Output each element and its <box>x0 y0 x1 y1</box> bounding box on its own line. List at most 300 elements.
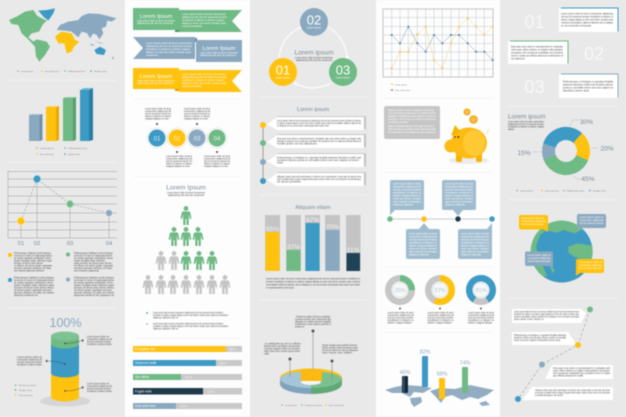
card 2: velit esse cillum dolore eu fugiat nulla pariatur <box>511 48 563 52</box>
text: above 01: sed do eiusmod tempor inci <box>145 112 171 116</box>
panel: percent columns <box>265 205 361 290</box>
note: blue: ac turpis egestas vestibulum tortor <box>14 282 53 284</box>
note: green: ac turpis egestas vestibulum tortor <box>74 257 113 260</box>
bar 45%: 45% <box>400 370 411 376</box>
donut legend: Semper risus <box>593 190 607 192</box>
bubble: gray top-right: Lorem ipsum dolor sit <box>580 216 604 219</box>
ribbon: blue-gray: Lorem ipsum dolor sit amet consectetur <box>200 52 238 54</box>
timeline dots <box>387 216 495 222</box>
bar: yellow <box>46 106 59 141</box>
callout text: consectetur adipiscing elit <box>87 385 112 388</box>
donut 81%: 81% <box>476 288 487 294</box>
box 3: sed do eiusmod tempor <box>409 238 437 242</box>
ribbon: yellow: incididunt ut labore et dolore magna <box>182 79 225 82</box>
callout: top: vestibulum ante ipsum primis in <box>295 323 332 326</box>
card 1: dolore magna aliqua ut enim ad minim veniam quis <box>561 18 614 22</box>
bubble: yellow right <box>576 259 604 276</box>
ribbon: green: Lorem ipsum dolor sit amet consectetur <box>137 20 175 22</box>
note 3: esse cillum dolore eu fugiat nulla pariatur excepteur <box>553 370 610 372</box>
number 02: 02 <box>584 44 604 64</box>
panel: ribbons <box>133 8 242 92</box>
panel: line chart <box>8 171 117 247</box>
box 2: incididunt ut labore et <box>445 192 473 194</box>
bubble: gray top-right <box>577 214 606 231</box>
card 3: tincidunt dictum porta ex convallis lorem sed sem sapien id lorem <box>277 159 359 162</box>
description: Lorem ipsum dolor sit amet consectetur <box>508 120 544 124</box>
bar: Duis aute irure: Duis aute irure <box>135 404 156 408</box>
donut legend: Lorem ipsum <box>520 190 533 192</box>
note: blue: senectus et netus et malesuada fames <box>14 279 55 282</box>
point: 03 <box>66 200 74 208</box>
bar: Fugiat nulla: 70% <box>207 390 215 394</box>
axis labels: 01 <box>18 241 24 247</box>
ring legend: Lorem ipsum <box>285 404 297 407</box>
box 2 <box>442 180 476 216</box>
note 1 <box>512 309 586 323</box>
text: below 02: didunt ut labore et dolore <box>166 162 193 166</box>
card 2: Duis aute irure dolor in reprehenderit in voluptate velit esse cillum dolore eu fugiat nulla <box>277 138 362 140</box>
box 2: Lorem ipsum dolor sit amet <box>445 182 473 186</box>
box 4: sed do eiusmod tempor <box>461 238 489 242</box>
circle 02: 02 <box>307 12 321 28</box>
map legend: Duis aute irure <box>45 70 60 73</box>
note: green: eget tempor sit amet ante donec <box>74 262 113 265</box>
cylinder legend: Semper risus <box>19 389 33 392</box>
ribbon: green: adipiscing elit sed do eiusmod tempor <box>182 16 227 19</box>
ribbon: yellow: Lorem ipsum dolor sit amet consectetur <box>137 80 175 82</box>
text: above 03: Lorem ipsum dolor sit amet <box>184 108 210 110</box>
text: above 03: consectetur adipiscing elit <box>184 110 210 113</box>
note: gray: ut labore et dolore magna aliqua ut enim ad minim veniam quis nostrud exercitation <box>153 325 229 328</box>
callout: top: Vivamus mattis rhoncus volutpat <box>296 316 330 318</box>
heading: Lorem ipsum <box>508 114 546 120</box>
map legend: Lorem ipsum <box>21 70 33 73</box>
card 4: Aliquam etiam erat velit scelerisque in dictum non consectetur a erat nam at lectus urna <box>277 176 362 178</box>
bar: Excepteur sint: 86% <box>229 348 237 352</box>
box 2: consectetur adipiscing elit <box>445 186 473 188</box>
card 2: pariatur excepteur sint occaecat cupidatat non proident sunt in culpa qui officia deserunt <box>277 140 361 143</box>
gray text box: Mauris blandit aliquet elit eget tincidunt <box>388 125 434 128</box>
ribbon: green: aliqua ut enim ad minim veniam quis <box>182 22 227 25</box>
callout text: Lorem ipsum dolor sit <box>87 336 109 338</box>
ribbon: yellow <box>133 68 242 92</box>
donut <box>541 126 591 176</box>
callout: top: porta et <box>295 326 304 328</box>
donut legend: Duis aute irure <box>545 190 560 192</box>
axis labels: 03 <box>67 241 73 247</box>
ribbon: green: adipiscing elit sed do eiusmod <box>137 22 174 25</box>
card 4 <box>260 172 366 186</box>
panel: 3D ring chart <box>264 316 358 407</box>
callout text: sed do eiusmod tempor <box>87 340 111 344</box>
ribbon: blue-gray: adipiscing elit sed do eiusmod tempor <box>146 45 192 48</box>
box 2: dolore magna aliqua ut <box>445 194 473 198</box>
card 4: sit amet porttitor <box>277 180 301 184</box>
callout: top <box>295 316 332 328</box>
panel: percent donuts <box>388 274 497 324</box>
text under donuts: Lorem ipsum dolor sit amet <box>468 312 494 314</box>
axis labels: 04 <box>106 241 113 247</box>
bubble: gray left: sed do eiusmod tempor <box>528 260 551 263</box>
gray text box <box>384 106 440 139</box>
text under donuts: consectetur adipiscing elit <box>428 314 454 317</box>
box 2: enim ad minim veniam <box>445 198 473 200</box>
bar: Deserunt mollit <box>133 360 242 366</box>
subtitle <box>167 192 205 197</box>
note: green: est mauris placerat <box>74 270 99 272</box>
text under donuts: incididunt ut labore et <box>388 319 414 322</box>
panel: map with bars <box>385 350 494 407</box>
callout text: consectetur adipiscing elit <box>17 358 42 362</box>
chart legend <box>391 83 411 92</box>
labels: 30% <box>580 119 593 126</box>
box 2: ullamco laboris <box>445 204 466 206</box>
ribbon: green: nostrud exercitation <box>182 25 203 28</box>
text: below 04: didunt ut labore et dolore <box>204 162 231 166</box>
description: aliqua <box>508 128 515 131</box>
ribbon: green: Lorem ipsum dolor sit amet consectetur <box>182 13 226 16</box>
note: green: eu libero sit amet quam egestas <box>74 264 114 268</box>
callout: left: In sollicitudin ac orci eu efficitur <box>265 342 301 346</box>
card 3: faucibus lorem duis <box>563 90 590 92</box>
box 4: Lorem ipsum dolor sit amet <box>461 232 489 236</box>
description: incididunt ut labore et dolore magna <box>508 126 545 128</box>
note: gray <box>66 276 115 297</box>
ring <box>280 368 342 394</box>
text: above 03: magna aliqua ut enim <box>184 118 208 120</box>
bar legend <box>36 147 87 156</box>
description: adipiscing elit sed do eiusmod tempor <box>508 123 544 126</box>
caption <box>266 278 361 290</box>
callout: right: Integer feugiat urna porttitor rhoncus <box>322 344 358 347</box>
bar: Deserunt mollit: 80% <box>219 362 227 366</box>
callout: right: sit amet tellus at nisi ut aliquam <box>322 349 358 352</box>
box 3: quis nostrud exercitation <box>409 250 438 254</box>
cylinder legend <box>15 384 37 397</box>
box 1: consectetur adipiscing elit <box>393 186 421 188</box>
box 3: dolore magna aliqua ut <box>409 244 437 248</box>
note: gray: ac turpis egestas vestibulum tortor <box>74 282 113 284</box>
column 65%: 65% <box>266 226 279 233</box>
bubble: gray left: consectetur adipiscing <box>528 257 551 260</box>
text: below 04: consectetur adipiscing elit <box>204 158 230 160</box>
callout: left: dolor lorem sem ornare ipsum dolor <box>264 350 300 353</box>
callout: left: finibus felis sed libero accumsan <box>264 345 301 348</box>
note: gray: Lorem ipsum dolor sit amet consectetur adipiscing elit sed do eiusmod tempor incididunt <box>153 322 223 326</box>
note 4: a pellentesque sit amet <box>535 394 563 397</box>
text: above 01: magna aliqua ut enim <box>145 118 169 120</box>
callout text: Lorem ipsum dolor sit <box>87 382 109 386</box>
circle 01: 01 <box>276 62 290 78</box>
panel: line chart notes <box>8 252 115 297</box>
ring legend <box>281 404 345 407</box>
bar: Excepteur sint <box>133 346 242 352</box>
panel: numbered circles <box>145 108 231 168</box>
text: above 01 <box>145 108 172 120</box>
ribbon: yellow: aliqua ut enim ad minim veniam quis <box>182 82 227 85</box>
description <box>508 120 545 131</box>
labels <box>518 119 614 183</box>
panel: numbered cards <box>508 8 618 98</box>
note: gray: quam feugiat vitae ultricies eget <box>74 284 114 287</box>
circle 02: 02 <box>174 136 181 142</box>
card 2: Duis aute irure dolor in reprehenderit in voluptate <box>511 46 564 48</box>
note: green <box>146 312 229 320</box>
people: green <box>169 206 217 270</box>
note: gray: ullamco laboris nisi ut <box>153 328 178 330</box>
note: gray: aenean ultricies mi vitae est mauris <box>74 292 115 294</box>
note: yellow: Pellentesque habitant morbi tristique <box>14 252 52 255</box>
bar legend: Pellentesque amet <box>68 147 87 150</box>
card 3: porta ex convallis lorem sed sem sapien id <box>563 86 614 90</box>
note: green: senectus et netus et malesuada fames <box>74 254 113 258</box>
card 1: Lorem ipsum dolor sit amet consectetur adipiscing <box>561 12 614 16</box>
card 3 <box>260 153 366 167</box>
panel: progress bars <box>133 346 242 409</box>
note: blue <box>8 276 55 297</box>
box 4: quis nostrud exercitation <box>461 250 490 254</box>
note: gray: placerat eleifend leo quisque sit <box>74 294 114 297</box>
text: below 04: Lorem ipsum dolor sit amet <box>204 155 230 158</box>
note 1: incididunt ut labore et dolore magna aliqua ut enim ad minim veniam quis <box>514 313 580 316</box>
note: blue: tempor sit amet ante donec libero <box>14 286 55 290</box>
bar: Deserunt mollit: Deserunt mollit <box>135 361 156 365</box>
card 1 <box>260 116 366 130</box>
box 4: enim ad minim veniam <box>461 248 489 250</box>
map legend <box>17 70 108 73</box>
text under donuts: dolore magna aliqua <box>388 322 412 324</box>
center text: Lorem ipsum dolor sit amet consectetur <box>295 56 333 60</box>
labels: 15% <box>518 150 531 157</box>
ring legend: Dictum accumsan <box>305 404 323 407</box>
axis labels: 02 <box>34 241 40 247</box>
circle 01: Lorem ipsum <box>276 76 290 80</box>
note: yellow: tempor sit amet ante donec <box>14 262 44 265</box>
card 1: Lorem ipsum dolor sit amet consectetur adipiscing elit sed do eiusmod tempor incididunt ut labore <box>277 120 362 122</box>
number 03: 03 <box>524 77 545 97</box>
bubble: yellow top-left: sed do eiusmod tempor <box>522 223 544 226</box>
donut 57%: 57% <box>435 288 446 294</box>
box 1: dolore magna aliqua ut <box>393 194 421 198</box>
bar: Excepteur sint: Excepteur sint <box>135 347 155 351</box>
subtitle: adipiscing elit sed do eiusmod <box>168 194 205 197</box>
point: 01 <box>17 217 25 225</box>
note: blue: placerat eleifend leo <box>14 294 39 297</box>
chart legend: Lorem ipsum <box>395 83 407 86</box>
card 2 <box>508 41 568 64</box>
panel: globe <box>519 214 606 283</box>
ring legend: Duis aute irure <box>329 404 345 407</box>
column 31%: 31% <box>346 247 360 254</box>
donut 25%: 25% <box>395 288 406 294</box>
circle 03: Lorem ipsum <box>336 76 350 80</box>
bubble: yellow right: Lorem ipsum dolor sit <box>579 261 602 264</box>
callout: right: non risus nec ullam <box>322 352 352 354</box>
number 01: 01 <box>524 12 545 32</box>
card 3: pharetra faucibus mollis erat tincidunt dictum <box>563 84 613 86</box>
bubble: yellow top-left: Lorem ipsum dolor sit <box>522 217 544 220</box>
bar legend: Duis aute irure <box>40 153 55 156</box>
center heading: Lorem ipsum <box>294 50 334 56</box>
note: yellow <box>8 252 53 272</box>
note 1: Lorem ipsum dolor sit amet consectetur adipiscing elit sed do eiusmod tempor <box>514 310 579 314</box>
note: blue: sit amet quam egestas semper <box>14 289 52 292</box>
callout: left <box>264 342 301 356</box>
map legend: Pellentesque amet <box>68 70 85 73</box>
note: yellow: semper aenean ultricies mi vitae <box>14 267 52 270</box>
callout: top: cursus porta nisi vehicula dui <box>295 318 332 321</box>
point: 04 <box>106 210 112 216</box>
ribbon: blue-gray: Lorem Ipsum <box>203 46 236 52</box>
callout text <box>17 336 113 393</box>
chart legend: Duis aute irure <box>395 89 411 92</box>
text: above 03: didunt ut labore et dolore <box>184 115 211 118</box>
card 3 <box>559 74 618 98</box>
cycle arrows <box>279 27 347 88</box>
center text <box>295 56 333 62</box>
gray text box: Vivamus mattis rhoncus volutpat cursus porta <box>388 109 435 112</box>
note 3: qui officia deserunt mollit <box>553 374 583 378</box>
note: yellow: eu libero sit amet quam egestas <box>14 264 53 268</box>
ribbon: green: Lorem Ipsum <box>140 14 173 20</box>
gray text box: nibh pulvinar a curabitur arcu erat accumsan <box>388 128 437 131</box>
column 70%: 70% <box>326 224 339 231</box>
donut legend <box>516 190 607 192</box>
panel: cycle diagram <box>269 8 357 88</box>
card 2: sunt in culpa qui officia deserunt mollit anim id <box>511 54 564 58</box>
note 2 <box>512 332 577 345</box>
note: green: semper aenean ultricies mi vitae <box>74 267 113 270</box>
text under donuts: incididunt ut labore et <box>428 319 454 322</box>
ribbon: yellow: nostrud exercitation <box>182 85 203 88</box>
panel: savings <box>384 106 489 164</box>
box 1: enim ad minim veniam <box>393 198 421 200</box>
circle 03 <box>329 58 357 86</box>
card 4: duis convallis tellus integer feugiat scelerisque varius morbi enim nunc faucibus a pellentesque <box>277 178 362 181</box>
note 1: nostrud exercitation ullamco laboris nisi ut aliquip ex ea commodo consequat <box>514 316 579 318</box>
labels: 45% <box>582 176 595 183</box>
card 2 <box>260 134 366 148</box>
note: green: Pellentesque habitant morbi tristique <box>74 252 114 255</box>
note: gray: senectus et netus et malesuada fames <box>74 279 115 282</box>
panel: donut chart <box>508 114 614 192</box>
callout text: incididunt ut labore dolore <box>17 364 43 366</box>
bar legend: Lorem ipsum <box>40 147 54 150</box>
text under donuts: Lorem ipsum dolor sit amet <box>388 312 414 314</box>
note: yellow: est mauris placerat eleifend <box>14 270 45 272</box>
note: blue: Pellentesque habitant morbi tristique <box>14 276 55 280</box>
card 3: duis <box>277 162 284 164</box>
bar: Duis aute irure: 47% <box>180 405 188 409</box>
text: below 02: Lorem ipsum dolor sit amet <box>166 155 192 158</box>
bar: Qui officia: 51% <box>185 376 193 380</box>
cylinder legend: Duis aute irure <box>19 394 34 397</box>
center text: adipiscing elit sed do eiusmod <box>296 59 333 62</box>
box 3: consectetur adipiscing elit <box>409 236 437 238</box>
panel: 3D bar chart <box>29 88 93 156</box>
bubble: gray top-right: sed do eiusmod tempor <box>580 222 604 225</box>
heading: Aliquam etiam <box>295 205 331 211</box>
text: below 02 <box>166 155 193 168</box>
box 2: sed do eiusmod tempor <box>445 188 473 192</box>
column 87%: 87% <box>306 217 319 224</box>
text under donuts: Lorem ipsum dolor sit amet <box>428 312 454 314</box>
text: above 03 <box>184 108 211 120</box>
ribbon: yellow: Lorem ipsum dolor sit amet consectetur <box>182 73 226 76</box>
text: below 02: sed do eiusmod tempor inci <box>166 160 192 163</box>
box 1 <box>390 180 424 215</box>
bubble: gray left: Lorem ipsum dolor sit <box>528 254 551 257</box>
column 37%: 37% <box>287 244 300 251</box>
bar: Qui officia: Qui officia <box>135 375 149 379</box>
note 4 <box>522 387 613 400</box>
map: continents <box>9 8 117 62</box>
panel: world map <box>9 8 117 73</box>
box 4: consectetur adipiscing elit <box>461 236 489 238</box>
text under donuts <box>388 312 494 324</box>
heading: Lorem Ipsum <box>166 184 206 192</box>
bubble: yellow top-left <box>519 215 548 232</box>
card 1 <box>559 8 618 32</box>
text under donuts: incididunt ut labore et <box>468 319 494 322</box>
bar 58%: 58% <box>437 372 448 378</box>
ribbon: yellow: adipiscing elit sed do eiusmod <box>137 82 174 85</box>
ribbon: blue-gray: aliqua ut enim ad minim veniam quis <box>146 51 192 54</box>
pins <box>290 332 332 380</box>
note 3 <box>545 365 613 379</box>
circle 03: 03 <box>194 136 201 142</box>
callout text: Lorem ipsum dolor sit <box>17 356 42 359</box>
bar: Fugiat nulla <box>133 388 242 394</box>
text: below 04: magna aliqua ut enim <box>204 165 228 168</box>
box 1: quis nostrud exercitation <box>393 200 422 204</box>
text under donuts: sed do eiusmod tempor <box>428 316 454 320</box>
note: gray: Pellentesque habitant morbi tristique <box>74 276 115 280</box>
card 1: ut aliquip ex ea commodo consequat duis aute irure <box>277 124 330 128</box>
note: blue: aenean ultricies mi vitae est mauris <box>14 292 55 294</box>
note 2: faucibus mollis erat tincidunt dictum porta ex convallis <box>514 336 567 340</box>
box 4: incididunt ut labore et <box>461 242 489 244</box>
ribbon: blue-gray: Lorem ipsum dolor sit amet consectetur <box>146 42 192 45</box>
bubble: gray left <box>525 252 553 268</box>
labels: 20% <box>600 146 614 152</box>
card 1: nostrud exercitation ullamco laboris nisi ut aliquip <box>561 22 614 24</box>
card 1: et dolore magna aliqua ut enim ad minim veniam quis nostrud exercitation ullamco laboris nisi <box>277 122 361 125</box>
gray text box: sagittis vestibulum ante ipsum primis in <box>388 115 437 118</box>
text: above 01: didunt ut labore et dolore <box>145 115 172 118</box>
text: above 01: consectetur adipiscing elit <box>145 110 171 113</box>
gray text box: cubilia curae <box>388 121 409 124</box>
box 1: incididunt ut labore et <box>393 192 421 194</box>
ribbon: blue-gray <box>133 37 242 62</box>
box 4: dolore magna aliqua ut <box>461 244 489 248</box>
note: green <box>66 252 114 272</box>
card 1: ex ea commodo consequat <box>561 24 591 28</box>
box 2: quis nostrud exercitation <box>445 200 474 204</box>
card 3: Pellentesque ut tristique in, egestas fringilla pharetra faucibus mollis erat <box>277 156 361 160</box>
ribbon: green: incididunt ut labore et dolore magna <box>182 19 225 22</box>
callout text: incididunt ut labore dolore <box>87 390 113 393</box>
bubble: yellow right: sed do eiusmod tempor <box>579 267 602 270</box>
gray text box: id imperdiet et porttitor at sem quisque <box>388 131 437 134</box>
caption: in reprehenderit commodo <box>266 286 295 290</box>
bar legend: Semper risus <box>68 153 81 156</box>
circle 01: 01 <box>154 136 161 142</box>
circle 01 <box>269 58 297 86</box>
card 2: mollit anim id est laborum <box>277 142 317 146</box>
box 1: sed do eiusmod tempor <box>393 188 421 192</box>
note: yellow: senectus et netus et malesuada fames <box>14 254 53 258</box>
